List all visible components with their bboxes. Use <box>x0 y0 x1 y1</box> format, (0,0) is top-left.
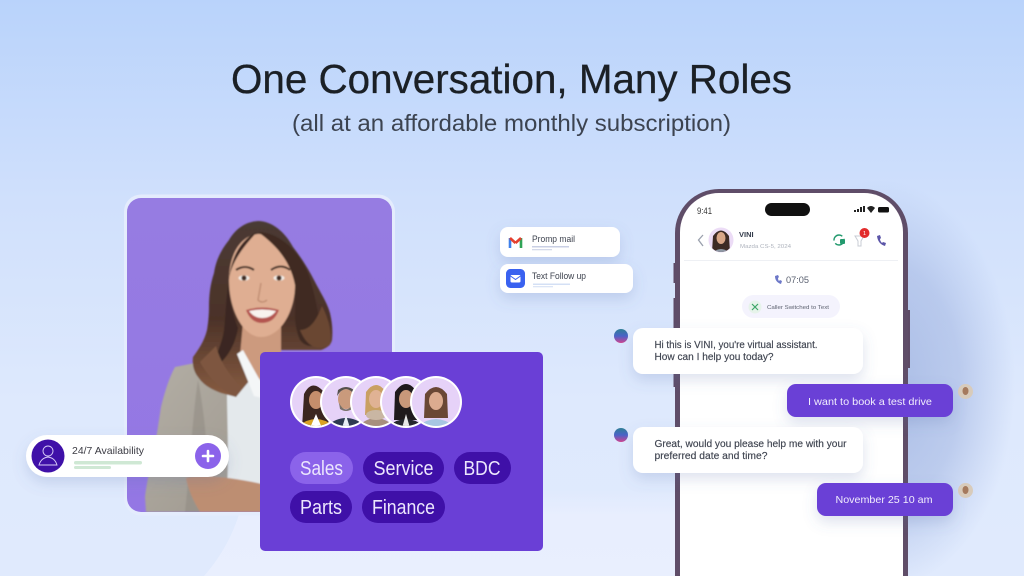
chat bubble: user date: November 25 10 am <box>836 495 932 506</box>
avatar 2 <box>320 376 361 428</box>
shirt <box>226 378 260 484</box>
chat bubble: user date <box>817 483 973 516</box>
card: Text Follow up: Text Follow up <box>532 271 586 281</box>
badge <box>860 228 870 238</box>
badge: 1 <box>863 231 866 237</box>
icon: plus button <box>195 443 221 469</box>
tag: Parts: Parts <box>300 497 342 519</box>
hair back <box>193 221 332 397</box>
chat bubble: assistant greeting: How can I help you today? <box>654 352 774 363</box>
chat bubble: assistant date question <box>614 427 863 473</box>
avatar: VINI <box>708 228 734 254</box>
card: Promp mail <box>500 227 620 257</box>
avatar 4 <box>380 376 421 428</box>
card: Text Follow up <box>500 264 633 293</box>
crossed arm <box>186 476 262 512</box>
tag: Service <box>363 452 444 484</box>
icon: phone <box>877 235 886 246</box>
eyebrows <box>236 266 290 270</box>
chat header <box>698 228 886 254</box>
icon: filter <box>855 236 864 246</box>
chat bubble: assistant greeting: Hi this is VINI, you're virtual assistant. <box>654 340 818 351</box>
tag: Finance: Finance <box>372 497 435 519</box>
pill: 24/7 availability <box>26 435 229 477</box>
chat bubble: assistant date question: Great, would you please help me with your <box>654 439 847 450</box>
tag: BDC <box>454 452 511 484</box>
panel: portrait card <box>124 194 395 516</box>
icon: green sync <box>834 235 845 245</box>
collar <box>237 350 262 398</box>
icon: gmail <box>510 238 521 248</box>
tag: Sales: Sales <box>300 458 343 480</box>
subtitle: (all at an affordable monthly subscription) <box>292 110 731 136</box>
label: 24/7 Availability <box>72 445 145 457</box>
chat bubble: assistant date question: preferred date and time? <box>654 451 768 462</box>
avatar: assistant orb <box>614 428 628 442</box>
portrait: smiling woman in blazer <box>145 221 332 512</box>
tag: Parts <box>290 491 352 523</box>
chat header: Mazda CS-5, 2024 <box>740 244 791 250</box>
status bar <box>697 203 889 216</box>
smile <box>246 308 279 323</box>
role tags <box>290 452 511 523</box>
neck <box>240 322 281 382</box>
call timer <box>775 275 809 286</box>
avatar 1 <box>290 376 331 428</box>
card: Promp mail: Promp mail <box>532 234 575 244</box>
icon: agent <box>32 440 64 472</box>
hair front <box>218 234 255 362</box>
avatar 3 <box>350 376 391 428</box>
call timer: 07:05 <box>786 275 809 286</box>
tag: BDC: BDC <box>464 458 500 480</box>
phone mockup <box>674 189 910 576</box>
chat bubble: assistant greeting <box>614 328 863 374</box>
title: One Conversation, Many Roles <box>231 56 792 102</box>
status bar: 9:41 <box>697 206 712 216</box>
avatar group <box>290 376 462 428</box>
tag: Service: Service <box>374 458 434 480</box>
status pill: caller switched <box>742 295 840 318</box>
face <box>229 234 295 337</box>
blazer <box>144 363 228 512</box>
tag: Finance <box>362 491 445 523</box>
chat header: VINI <box>739 230 754 239</box>
chat bubble: user test drive: I want to book a test drive <box>808 397 932 408</box>
avatar: assistant orb <box>614 329 628 343</box>
eyes <box>238 275 250 281</box>
nose <box>258 283 267 302</box>
status pill: caller switched: Caller Switched to Text <box>767 305 829 311</box>
icon: blue mail <box>506 269 525 288</box>
avatar: user <box>958 384 973 399</box>
panel: roles <box>260 352 543 551</box>
avatar: user <box>958 483 973 498</box>
chat bubble: user test drive <box>787 384 973 417</box>
tag: Sales <box>290 452 353 484</box>
avatar 5 <box>410 376 462 428</box>
